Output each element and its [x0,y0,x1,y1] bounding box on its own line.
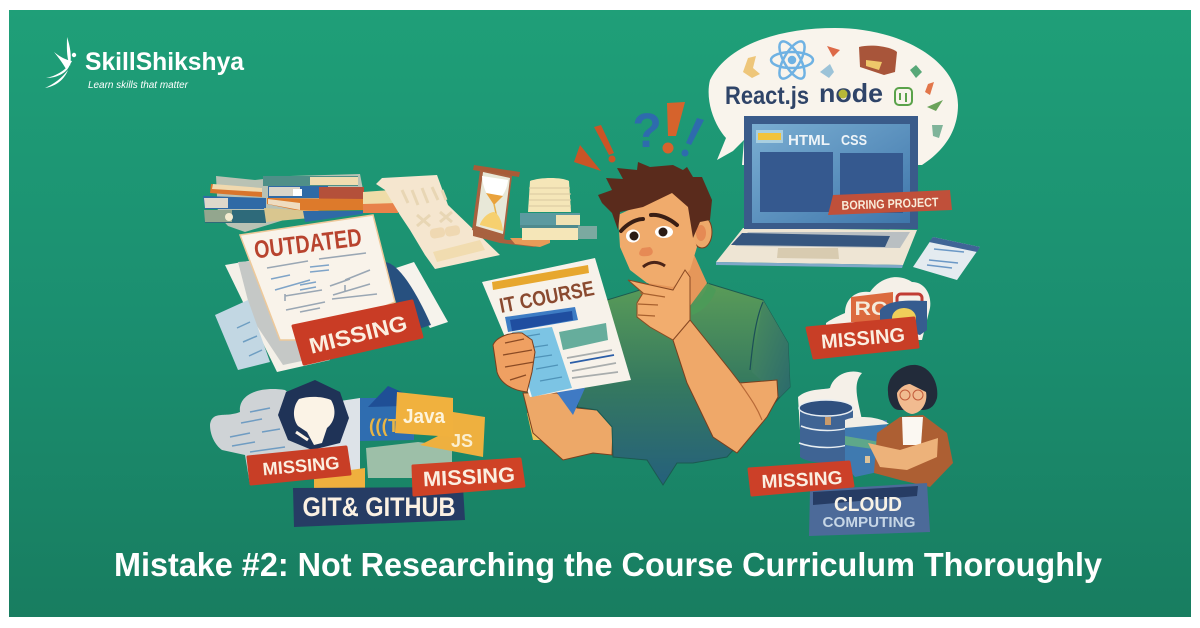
blue exclamation [686,118,704,145]
white cloud [826,277,930,340]
tab highlight [756,130,783,143]
student figure [523,162,790,485]
html label: HTML [788,132,830,149]
java card [395,392,453,437]
laptop base [716,228,917,265]
hand finger creases [503,339,534,380]
eyebrows [621,215,677,231]
hair [598,162,712,238]
outdated sheet [240,215,395,340]
missing tag: MISSING [761,468,843,493]
title: Mistake #2: Not Researching the Course Curriculum Thoroughly [114,546,1103,583]
document lines [267,253,377,312]
blue question mark: ? [632,105,662,158]
database cylinder small [845,417,889,477]
missing tag left: MISSING [262,453,340,479]
white cloud [798,371,862,430]
papers behind [215,255,448,372]
leaflet heading: IT COURSE [498,277,596,318]
right arm [673,320,778,453]
icon: node mark [895,88,912,105]
git and github banner [293,487,465,527]
blue box [360,386,414,441]
woman's face [897,384,926,414]
git and github banner: GIT& GITHUB [302,492,456,522]
icon: react atom [771,38,813,82]
grey cloud with notes [210,389,325,485]
mouth [643,262,665,267]
icon: hourglass [472,165,550,247]
neck [640,250,707,306]
speech bubble [709,28,958,165]
panel with notes [320,398,360,480]
java card: Java [403,406,446,428]
js card [420,412,485,457]
framework logos: RC [854,299,888,320]
blue folder under leaflet [555,388,585,415]
book stack beside hourglass [520,178,597,240]
woman's hair [888,365,937,410]
face [618,190,697,287]
node label: node [819,78,883,108]
open book [868,438,938,470]
icon: github octocat [278,380,349,450]
icon: leaping figure [45,37,76,88]
nose [639,247,653,256]
icon: red cup [859,46,897,75]
missing frameworks group [807,277,930,358]
missing tag right: MISSING [422,464,516,491]
yellow tag behind [314,468,365,490]
leaflet blue header [505,307,578,332]
hand on chin [628,270,690,340]
git and languages cluster [210,380,524,527]
orange warning mark [574,145,601,171]
leaflet column lines [522,334,562,381]
missing tag right [413,459,524,495]
js card: JS [451,431,473,451]
book pile, top left [203,174,400,232]
right window [840,153,903,213]
cloud computing box: CLOUD [834,494,902,516]
small decorative marks [743,46,943,138]
collar [690,283,716,315]
logo wordmark: SkillShikshya [85,48,245,76]
cloud computing group [749,365,953,536]
jacket [874,415,953,487]
shirt [902,417,923,445]
small card [913,237,980,280]
logo tagline: Learn skills that matter [88,80,189,91]
woman reading [868,365,953,487]
node yellow dot [838,90,848,98]
missing tag left [248,447,350,484]
green box [366,442,452,478]
eyes [626,226,673,242]
sleeve [752,300,790,397]
database cylinder large [799,400,853,463]
css label: CSS [841,132,867,149]
elbow crease [740,383,762,420]
missing tag [749,462,853,495]
cloud computing box [809,483,930,536]
it course leaflet [482,258,631,415]
missing tag: MISSING [307,310,410,359]
shirt [577,283,790,485]
outdated heading: OUTDATED [253,224,363,264]
missing tag: MISSING [820,324,906,354]
react.js label: React.js [725,82,809,110]
outdated document stack [215,215,448,372]
woman's glasses [900,390,923,400]
leaflet yellow bar [492,265,589,290]
hand holding leaflet [493,333,535,392]
sleeve seam [750,302,763,370]
leaflet blue column [512,327,572,397]
laptop [716,116,980,280]
blue box: (((T [369,416,399,436]
leaflet teal image [559,323,608,350]
leaflet text lines [567,350,618,378]
punctuation marks above head [574,102,704,171]
ear [692,216,712,248]
laptop screen bezel [744,116,918,229]
scroll paper with faded marks [376,175,500,269]
orange exclamation [667,102,685,136]
cloud computing box: COMPUTING [822,514,916,531]
left window [760,152,833,212]
left arm [523,393,613,460]
logo [45,37,245,91]
missing tag [293,301,422,364]
yellow corner behind arm [527,413,540,440]
finger creases [638,293,665,316]
laptop screen [752,124,910,223]
boring project tag: BORING PROJECT [841,195,939,213]
boring project tag [828,190,952,215]
